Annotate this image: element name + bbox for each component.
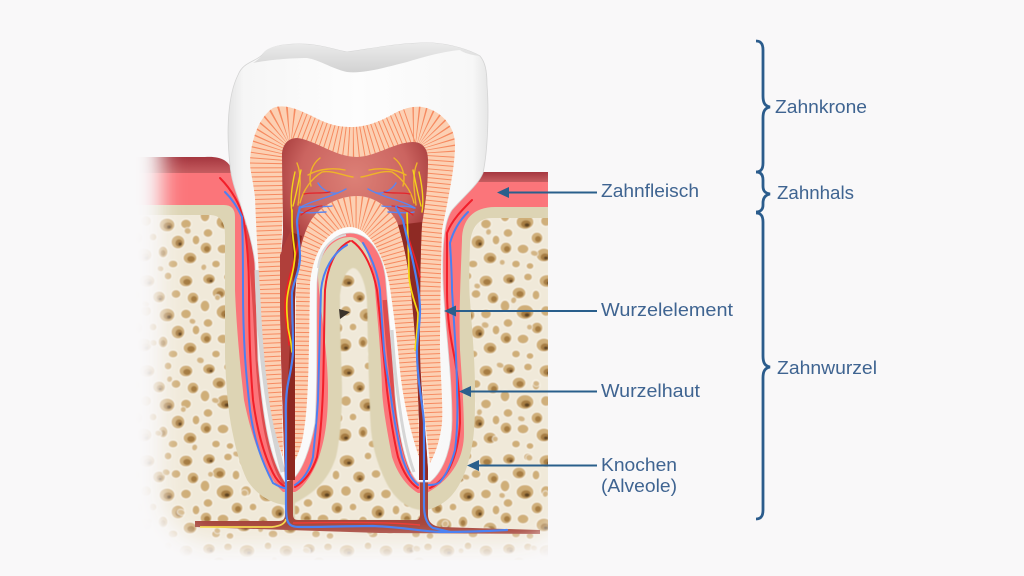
nerve and vessel tube below roots [195,480,540,534]
red vessels [220,178,472,488]
bracket: Zahnhals [756,172,770,212]
upper gum edge right [478,172,548,182]
blood vessels in ligament [220,178,472,488]
left nerve branches [291,158,353,215]
label: Knochen (Alveole) [601,455,677,496]
label: Zahnhals: Zahnhals [777,183,854,203]
main canal vessels [285,207,507,532]
label: Wurzelelement: Wurzelelement [601,300,733,320]
bracket: Zahnwurzel [756,213,770,519]
dark root canal right [398,222,428,480]
upper gum edge left [144,156,231,173]
crown occlusal surface [253,43,480,72]
arrow: Zahnfleisch [497,187,597,198]
nerves and vessels in pulp [285,158,507,532]
root shading [257,235,414,472]
arrow: Wurzelhaut [459,386,597,397]
alveolar bone layer [130,205,560,520]
spongy bone [130,205,560,560]
bracket: Zahnkrone [756,41,770,172]
yellow canal lines [287,210,418,352]
label: Wurzelhaut: Wurzelhaut [601,381,700,401]
label: Zahnkrone: Zahnkrone [775,97,867,117]
pulp chamber and root canals [280,138,428,480]
label: Knochen (Alveole): Knochen [601,455,677,475]
darker ligament along root [246,225,412,484]
tooth body [228,43,488,482]
dark root canal left [280,232,303,480]
tooth illustration [130,43,560,560]
arrow: Knochen [467,460,597,471]
interdental bone [295,268,420,520]
darker strip in left canal [287,232,302,480]
blue main vessel left [286,207,507,532]
blue main vessel right [396,207,450,532]
dentine inner arch [295,196,419,460]
right nerve branches [361,158,423,215]
yellow nerve [200,519,286,527]
arrow: Wurzelelement [444,306,597,316]
dentine outer layer [240,100,460,480]
label: Zahnfleisch: Zahnfleisch [601,181,699,201]
label: Zahnwurzel: Zahnwurzel [777,358,877,378]
blue vessels [225,192,468,488]
gum and periodontal ligament [130,173,560,493]
bone, gum and ligament tissue [130,157,560,560]
dark spot in bone [339,309,350,319]
red canal lines [285,222,420,345]
label: Knochen (Alveole): (Alveole) [601,476,677,496]
